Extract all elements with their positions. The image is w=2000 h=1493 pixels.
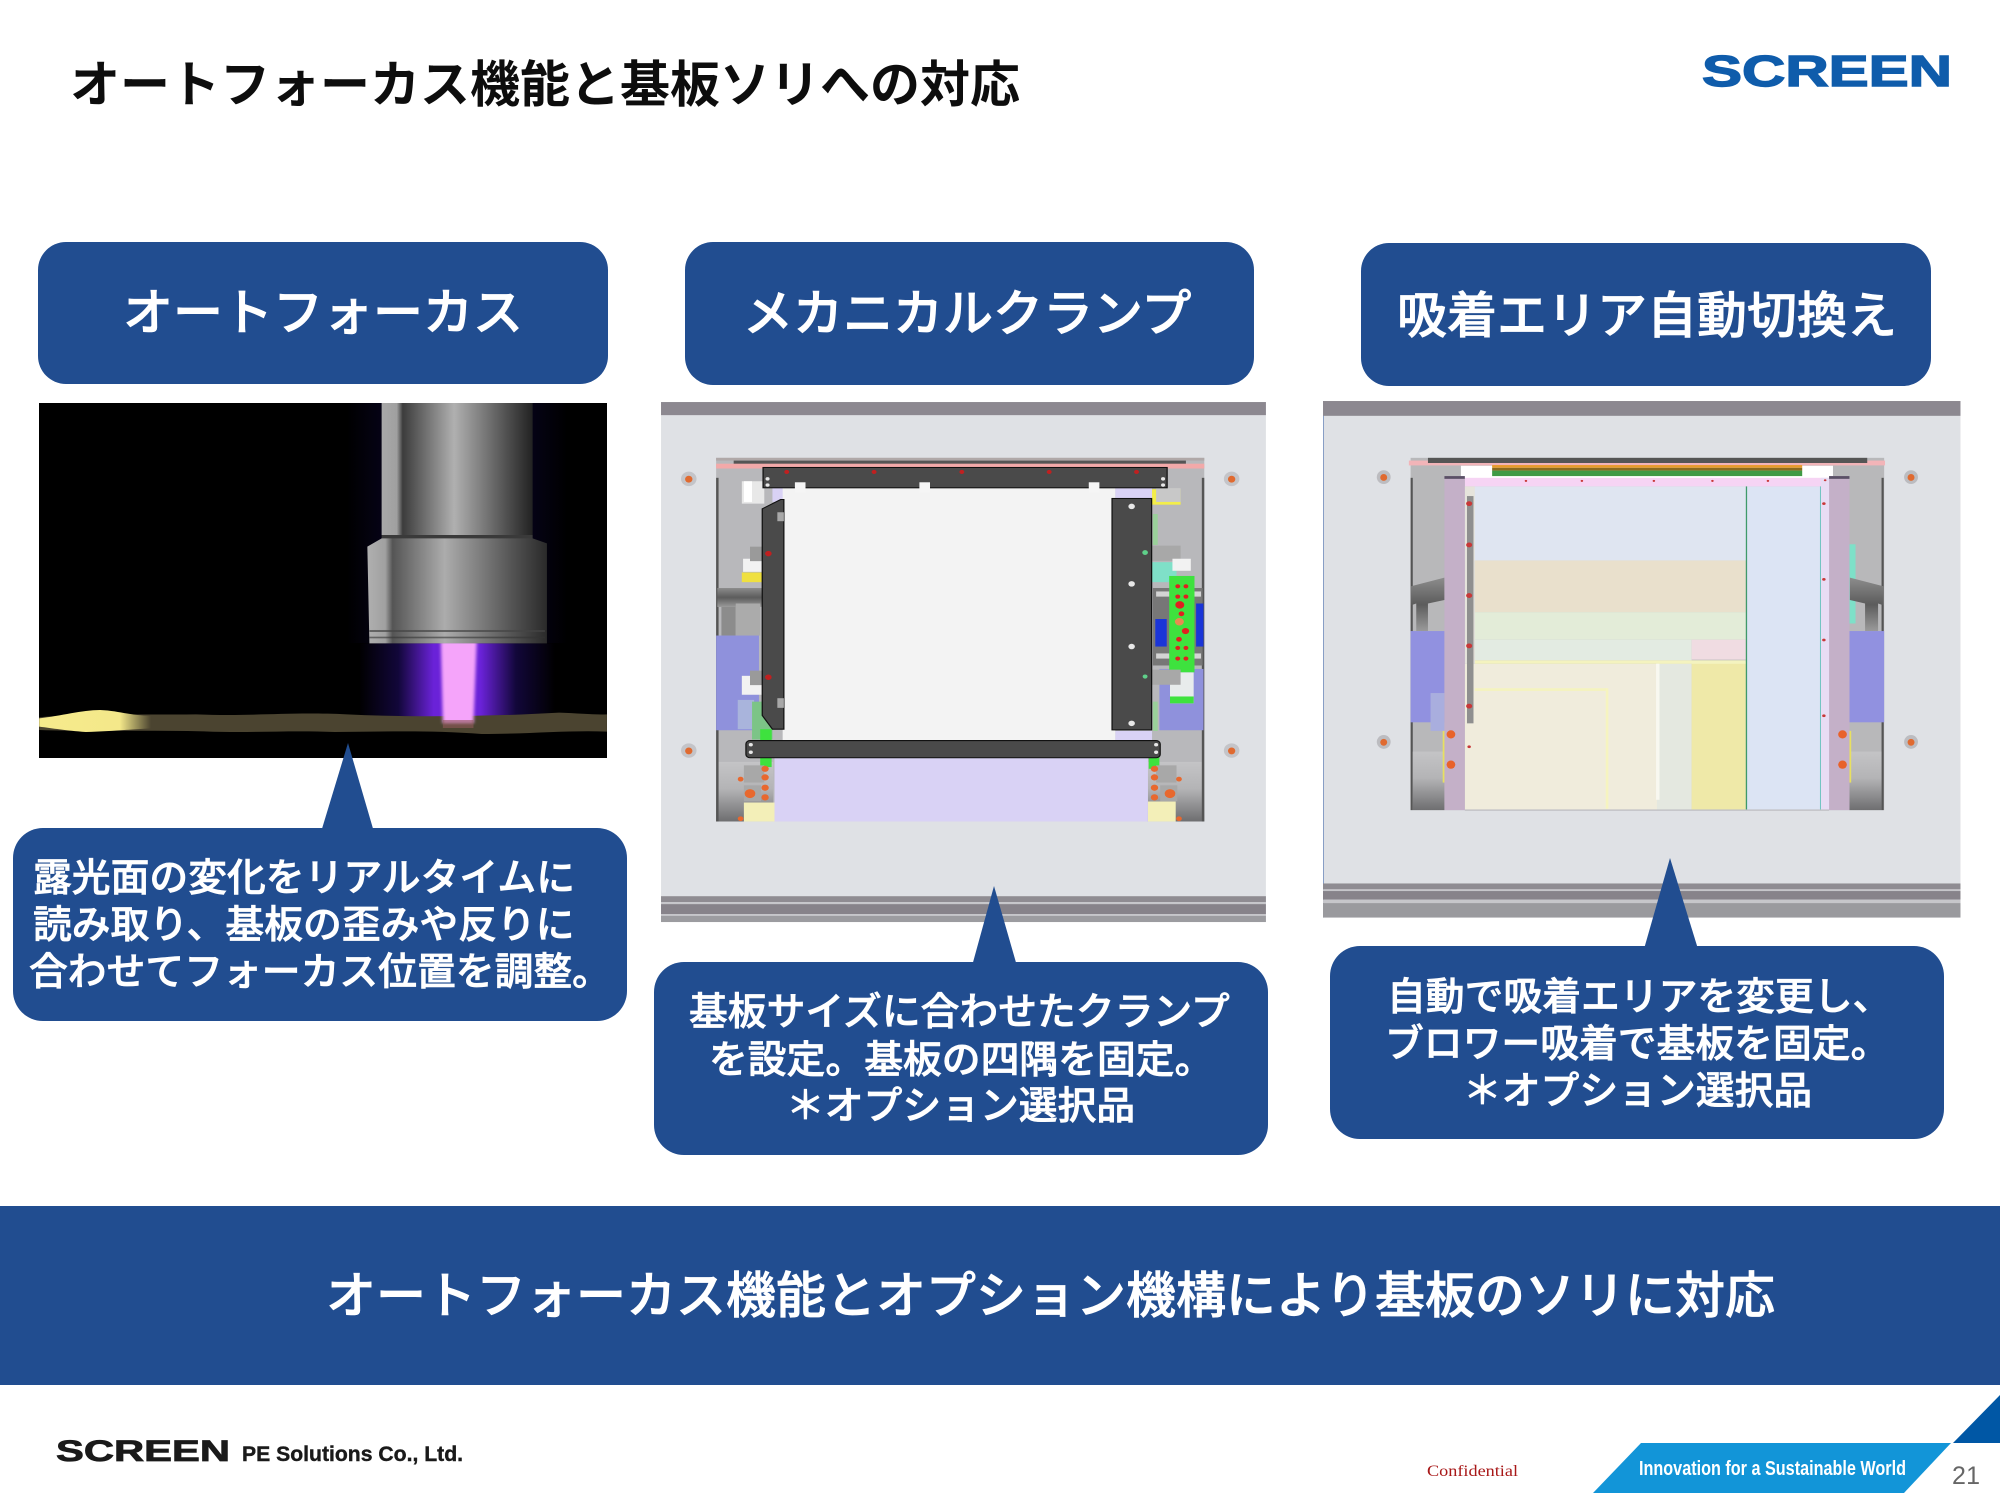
heading: autofocus: オートフォーカス <box>123 273 523 345</box>
image: autofocus illustration <box>39 403 607 758</box>
heading: mechanical clamp: メカニカルクランプ <box>743 274 1192 346</box>
heading: suction area switching: 吸着エリア自動切換え <box>1397 276 1897 348</box>
callout: mechanical clamp description: ＊オプション選択品 <box>786 1075 1135 1131</box>
confidential mark: Confidential <box>1427 1463 1519 1480</box>
callout: autofocus description <box>13 743 627 1021</box>
image: mechanical clamp machine view <box>661 402 1266 922</box>
title: オートフォーカス機能と基板ソリへの対応 <box>70 45 1020 117</box>
arrow: pointer to clamp image <box>972 886 1017 966</box>
callout: suction area description: 自動で吸着エリアを変更し、 <box>1387 966 1891 1022</box>
callout: mechanical clamp description: 基板サイズに合わせたクランプ <box>689 981 1230 1037</box>
footer logo: SCREEN PE Solutions: SCREEN <box>56 1435 230 1468</box>
callout: suction area description: ブロワー吸着で基板を固定。 <box>1385 1013 1889 1069</box>
summary banner: オートフォーカス機能とオプション機構により基板のソリに対応 <box>326 1256 1775 1328</box>
page number: 21 <box>1952 1462 1980 1490</box>
summary banner <box>0 1206 2000 1385</box>
footer logo: SCREEN PE Solutions <box>56 1435 463 1468</box>
callout: suction area description: ＊オプション選択品 <box>1463 1060 1812 1116</box>
arrow: pointer to autofocus image <box>321 743 374 832</box>
callout: suction area description <box>1330 858 1944 1139</box>
slogan ribbon <box>1593 1443 1951 1493</box>
footer logo: SCREEN PE Solutions: PE Solutions Co., Ltd. <box>242 1443 463 1466</box>
callout: autofocus description: 露光面の変化をリアルタイムに <box>33 847 575 903</box>
image: suction area machine view <box>1323 401 1960 918</box>
corner triangle <box>1953 1395 2000 1443</box>
callout: mechanical clamp description <box>654 886 1268 1155</box>
arrow: pointer to suction image <box>1644 858 1698 949</box>
heading: autofocus <box>38 242 608 384</box>
logo: SCREEN: SCREEN <box>1702 47 1952 96</box>
slogan ribbon: Innovation for a Sustainable World <box>1639 1458 1906 1480</box>
heading: suction area switching <box>1361 243 1931 386</box>
callout: autofocus description: 読み取り、基板の歪みや反りに <box>33 894 575 950</box>
callout: mechanical clamp description: を設定。基板の四隅を固定。 <box>709 1029 1213 1085</box>
callout: autofocus description: 合わせてフォーカス位置を調整。 <box>29 941 611 997</box>
heading: mechanical clamp <box>685 242 1254 385</box>
